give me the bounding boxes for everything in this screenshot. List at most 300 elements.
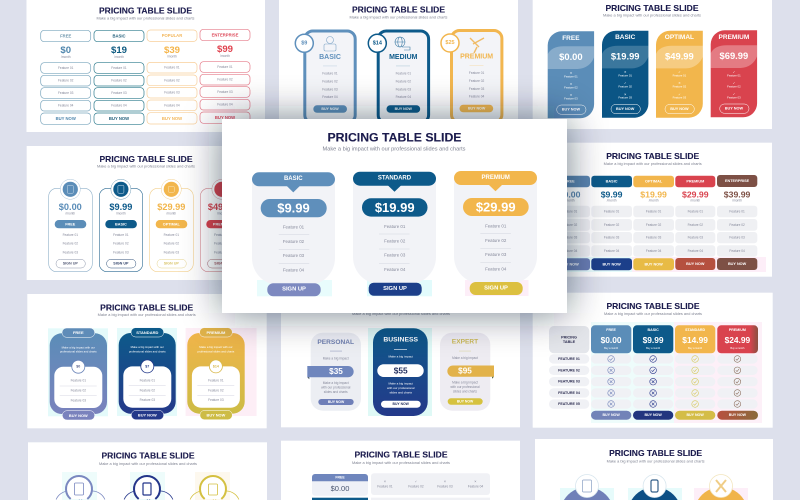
column: basic $9.99 bbox=[591, 176, 632, 270]
card: premium $69.99: BUY NOW bbox=[725, 107, 743, 111]
column: premium $29.99: BUY NOW bbox=[686, 262, 705, 266]
card: premium $69.99: Feature 03 bbox=[727, 95, 741, 99]
card: business $55: $55 bbox=[394, 366, 408, 376]
column: enterprise $39.99 bbox=[717, 175, 757, 270]
panel: personal business expert slide bbox=[281, 300, 520, 427]
row: free $0.00: ✕ bbox=[474, 480, 477, 484]
column: basic: $19 bbox=[111, 45, 127, 56]
card: optimal $29.99: /month bbox=[166, 212, 176, 216]
subheading: Make a big impact with our professional slides and charts bbox=[607, 460, 705, 464]
card: free: Feature 02 bbox=[71, 389, 86, 393]
feature row labels: FEATURE 03 bbox=[558, 380, 580, 384]
card: basic: BUY NOW bbox=[321, 107, 339, 111]
card: basic $19.99: BUY NOW bbox=[616, 107, 635, 111]
column: optimal $19.99: Feature 03 bbox=[646, 236, 662, 240]
card: premium: PREMIUM bbox=[460, 54, 493, 60]
column: premium $29.99 bbox=[675, 176, 715, 270]
card: free: Feature 03 bbox=[71, 398, 86, 402]
icon: globe bbox=[395, 37, 410, 50]
card: optimal $49.99: Feature 01 bbox=[673, 74, 687, 78]
feature row labels: FEATURE 05 bbox=[558, 402, 580, 406]
row: free $0.00: Feature 01 bbox=[377, 485, 393, 489]
card: optimal $49.99: BUY NOW bbox=[670, 107, 689, 111]
column: free $0.00: /month bbox=[565, 198, 575, 202]
column: free $0.00: Feature 03 bbox=[562, 236, 578, 240]
column: enterprise $39.99: BUY NOW bbox=[728, 262, 747, 266]
button: sign up: SIGN UP bbox=[282, 287, 306, 293]
column: enterprise: Feature 03 bbox=[217, 90, 233, 94]
column: basic $9.99 bbox=[633, 325, 673, 420]
feature list: Feature 03 bbox=[283, 253, 305, 258]
card: optimal $49.99 bbox=[656, 31, 703, 118]
feature list: Feature 04 bbox=[384, 267, 406, 272]
card: basic $9.99: Feature 02 bbox=[113, 242, 129, 246]
plan header: STANDARD bbox=[378, 175, 412, 181]
heading: PRICING TABLE SLIDE bbox=[100, 154, 193, 164]
card: personal $35: with our professional bbox=[321, 385, 351, 389]
card: free $0.00: $0.00 bbox=[59, 202, 82, 212]
heading: PRICING TABLE SLIDE bbox=[328, 131, 462, 145]
column: free $0.00 bbox=[591, 325, 631, 420]
column: popular: Feature 04 bbox=[164, 103, 180, 107]
column: basic $9.99: BUY NOW bbox=[602, 262, 621, 266]
column: free: Feature 01 bbox=[58, 66, 74, 70]
row: free $0.00: ✓ bbox=[415, 480, 417, 484]
column: free $0.00: Feature 01 bbox=[562, 210, 578, 214]
card: personal $35: slides and charts bbox=[324, 390, 348, 394]
card: standard $19.99 bbox=[353, 172, 436, 296]
card: premium bbox=[441, 30, 502, 122]
column: premium $29.99: /month bbox=[690, 198, 700, 202]
column: premium $24.99: PREMIUM bbox=[729, 328, 746, 332]
column: optimal $19.99: $19.99 bbox=[640, 189, 667, 199]
card: standard bbox=[117, 328, 177, 420]
column: enterprise $39.99: /month bbox=[732, 198, 742, 202]
subheading: Make a big impact with our professional slides and charts bbox=[99, 462, 197, 466]
heading: PRICING TABLE SLIDE bbox=[354, 450, 448, 460]
price pill: $29.99 bbox=[476, 200, 516, 214]
card: expert $95: Make a big impact bbox=[452, 356, 478, 360]
card: free $0.00: SIGN UP bbox=[63, 262, 78, 266]
column: premium $29.99: PREMIUM bbox=[686, 180, 704, 184]
card: basic: Feature 04 bbox=[322, 95, 338, 99]
column: basic: BASIC bbox=[112, 34, 126, 38]
card: premium $69.99: $69.99 bbox=[720, 50, 748, 61]
card: free bbox=[48, 328, 108, 420]
subheading: Make a big impact with our professional slides and charts bbox=[322, 146, 466, 152]
column: premium $29.99: $29.99 bbox=[682, 189, 709, 199]
card: business $55: Make a big impact bbox=[389, 382, 413, 386]
icon circle: standard bbox=[124, 476, 173, 500]
card: free $0.00: Feature 03 bbox=[564, 96, 578, 100]
card: basic $9.99: Feature 01 bbox=[113, 233, 129, 237]
panel: bottom middle cropped list table slide bbox=[281, 441, 520, 500]
card: free: Feature 01 bbox=[71, 379, 86, 383]
card: optimal $29.99: SIGN UP bbox=[164, 262, 179, 266]
card: free $0.00 bbox=[548, 31, 594, 118]
panel: feature comparison matrix slide bbox=[533, 293, 773, 428]
subheading: Make a big impact with our professional slides and charts bbox=[98, 313, 196, 317]
card: medium: Feature 03 bbox=[396, 87, 411, 91]
card: premium: BUY NOW bbox=[468, 106, 486, 110]
card: premium: Feature 02 bbox=[469, 79, 485, 83]
column: enterprise $39.99: Feature 01 bbox=[729, 210, 745, 214]
column: free $0.00: $0.00 bbox=[559, 189, 581, 199]
column: basic $9.99: Feature 03 bbox=[604, 236, 620, 240]
card: optimal $29.99 bbox=[150, 179, 193, 272]
column: optimal $19.99: Feature 04 bbox=[646, 249, 662, 253]
card: basic $19.99: Feature 03 bbox=[618, 96, 632, 100]
feature list: Feature 03 bbox=[485, 252, 507, 257]
card: expert $95: EXPERT bbox=[452, 338, 478, 346]
card: premium: Feature 02 bbox=[208, 388, 224, 392]
column: standard $14.99: Buy a month bbox=[688, 347, 703, 350]
subheading: Make a big impact with our professional slides and charts bbox=[604, 312, 702, 316]
feature list: Feature 04 bbox=[485, 266, 507, 272]
card: basic $19.99: ✕ bbox=[624, 92, 627, 96]
card: premium: PREMIUM bbox=[206, 330, 226, 335]
panel: five-column comparison table slide bbox=[533, 143, 772, 277]
card: optimal $29.99: Feature 01 bbox=[164, 233, 179, 237]
card: premium $69.99: ✓ bbox=[733, 81, 735, 85]
badge: $14: $14 bbox=[373, 40, 383, 46]
plan header: PREMIUM bbox=[482, 175, 510, 181]
heading: PRICING TABLE SLIDE bbox=[609, 448, 702, 458]
column: premium $24.99: BUY NOW bbox=[729, 413, 747, 417]
column: enterprise: ENTERPRISE bbox=[212, 32, 239, 38]
column: enterprise: Feature 04 bbox=[217, 103, 233, 107]
feature list: Feature 02 bbox=[485, 238, 507, 243]
feature list: Feature 02 bbox=[283, 239, 305, 244]
card: premium $49.99: $49.99 bbox=[208, 202, 236, 212]
column: basic $9.99: BASIC bbox=[606, 180, 618, 184]
column: free $0.00 bbox=[549, 176, 590, 270]
column: optimal $19.99: OPTIMAL bbox=[645, 180, 663, 184]
column: premium $24.99 bbox=[717, 325, 758, 420]
column: basic $9.99: BUY NOW bbox=[644, 413, 662, 417]
subheading: Make a big impact with our professional slides and charts bbox=[603, 14, 701, 18]
column: enterprise $39.99: $39.99 bbox=[724, 189, 751, 199]
column: free $0.00: FREE bbox=[565, 180, 575, 184]
card: free $0.00: FREE bbox=[65, 222, 76, 226]
card: basic $19.99: $19.99 bbox=[611, 51, 640, 62]
card: expert $95: $95 bbox=[458, 367, 472, 376]
column: enterprise: BUY NOW bbox=[215, 115, 235, 120]
card: basic bbox=[295, 31, 355, 123]
row: free $0.00: Feature 03 bbox=[437, 485, 453, 489]
column: free: Feature 03 bbox=[58, 91, 74, 95]
column: optimal $19.99: Feature 01 bbox=[646, 210, 662, 214]
card: medium: Feature 04 bbox=[396, 95, 411, 99]
card: free $0.00: $0.00 bbox=[559, 51, 583, 62]
column: basic $9.99: $9.99 bbox=[643, 335, 664, 345]
card: premium $49.99: Feature 02 bbox=[214, 242, 230, 246]
icon circle: premium bbox=[190, 476, 239, 500]
feature list bbox=[379, 224, 410, 272]
card: premium $49.99: Feature 03 bbox=[214, 251, 230, 255]
card: standard: Feature 01 bbox=[140, 378, 155, 382]
column: popular bbox=[147, 30, 197, 124]
column: basic $9.99: BASIC bbox=[648, 328, 659, 332]
column: popular: Feature 03 bbox=[164, 91, 180, 95]
card: business $55 bbox=[368, 328, 432, 416]
card: expert $95: with our professional bbox=[450, 385, 480, 389]
card: basic $9.99: Feature 03 bbox=[113, 251, 129, 255]
feature row labels: FEATURE 02 bbox=[558, 368, 580, 372]
card: premium: Feature 04 bbox=[469, 94, 485, 98]
card: basic $19.99: Feature 02 bbox=[618, 85, 632, 89]
column: premium $29.99: Feature 01 bbox=[688, 210, 703, 214]
card: optimal $49.99: Feature 02 bbox=[673, 85, 687, 89]
card: optimal $29.99: $29.99 bbox=[157, 202, 185, 212]
feature list: Feature 01 bbox=[283, 224, 305, 230]
card: medium: Feature 02 bbox=[396, 79, 411, 83]
card: optimal $49.99: $49.99 bbox=[665, 51, 694, 62]
card: personal $35: PERSONAL bbox=[317, 339, 354, 346]
column: basic: BUY NOW bbox=[109, 116, 129, 121]
card: free: FREE bbox=[73, 330, 84, 335]
card: standard: STANDARD bbox=[136, 330, 158, 335]
column: basic $9.99: $9.99 bbox=[601, 189, 623, 199]
feature list bbox=[480, 224, 511, 272]
card: basic $9.99: $9.99 bbox=[109, 202, 132, 212]
column: free: Feature 04 bbox=[58, 104, 74, 108]
row: free $0.00: ✕ bbox=[444, 480, 447, 484]
column: free $0.00: BUY NOW bbox=[560, 262, 579, 266]
column: basic: Feature 04 bbox=[111, 104, 127, 108]
card: optimal $49.99: ✓ bbox=[678, 70, 681, 74]
subheading: Make a big impact with our professional slides and charts bbox=[97, 165, 195, 169]
subheading: Make a big impact with our professional slides and charts bbox=[96, 17, 195, 21]
card: free $0.00 bbox=[49, 179, 92, 272]
column: free: Feature 02 bbox=[58, 79, 74, 83]
corner label: TABLE bbox=[563, 340, 576, 344]
feature list: Feature 02 bbox=[384, 238, 406, 244]
dome: free bbox=[564, 474, 610, 500]
card: free $0.00: ✕ bbox=[570, 71, 573, 75]
column: free $0.00: Feature 04 bbox=[562, 249, 578, 253]
column: standard $14.99: BUY NOW bbox=[686, 413, 704, 417]
subheading: Make a big impact with our professional slides and charts bbox=[604, 162, 702, 166]
column: popular: $39 bbox=[164, 45, 180, 56]
panel: outlined cards with icon circles slide bbox=[27, 146, 265, 280]
card: optimal $49.99: ✓ bbox=[678, 92, 681, 96]
column: basic $9.99: /month bbox=[607, 198, 617, 202]
card: free: professional slides and charts bbox=[60, 350, 97, 354]
heading: PRICING TABLE SLIDE bbox=[606, 301, 700, 311]
card: standard: BUY NOW bbox=[138, 412, 157, 418]
card: premium $49.99: PREMIUM bbox=[213, 222, 231, 226]
subheading: Make a big impact with our professional slides and charts bbox=[352, 461, 450, 465]
panel: rounded gradient cards slide bbox=[27, 294, 267, 428]
card: premium $29.99 bbox=[454, 171, 537, 296]
card: standard: $7 bbox=[145, 364, 149, 368]
card: free $0.00: Feature 03 bbox=[63, 251, 78, 255]
column: enterprise: Feature 02 bbox=[217, 78, 233, 82]
row: free $0.00: Feature 04 bbox=[468, 485, 483, 489]
soft shadow of the main slide bbox=[222, 119, 567, 313]
feature list: Feature 04 bbox=[283, 268, 305, 272]
card: free $0.00: Feature 01 bbox=[564, 74, 578, 78]
card: optimal $29.99: Feature 03 bbox=[164, 251, 179, 255]
column: enterprise: $99 bbox=[217, 44, 233, 55]
card: business $55: BUY NOW bbox=[393, 402, 410, 406]
panel: outlined four-tier pricing table slide bbox=[26, 0, 265, 132]
card: free $0.00: FREE bbox=[562, 35, 580, 42]
column: popular: POPULAR bbox=[162, 33, 182, 38]
panel: bottom left cropped icon cards slide bbox=[28, 442, 267, 500]
column: basic: Feature 01 bbox=[111, 66, 127, 70]
panel: solid colour cards slide bbox=[533, 0, 772, 129]
card: expert $95: slides and charts bbox=[453, 390, 477, 394]
card: basic $19.99: ✕ bbox=[624, 70, 627, 74]
price pill: $19.99 bbox=[375, 200, 415, 215]
card: premium bbox=[186, 328, 257, 420]
card: premium $69.99: ✓ bbox=[733, 70, 735, 74]
row: free $0.00: $0.00 bbox=[331, 484, 349, 493]
card: medium: BUY NOW bbox=[395, 107, 413, 111]
column: optimal $19.99: Feature 02 bbox=[646, 223, 662, 227]
card: basic $19.99 bbox=[602, 31, 648, 118]
column: free $0.00: Buy a month bbox=[604, 347, 619, 350]
column: free $0.00: FREE bbox=[606, 328, 616, 332]
card: premium: Make a big impact with our bbox=[199, 345, 233, 349]
card: premium $69.99: ✓ bbox=[733, 92, 735, 96]
column: basic $9.99: Feature 01 bbox=[604, 210, 620, 214]
column: optimal $19.99: /month bbox=[649, 198, 659, 202]
plan header: BASIC bbox=[284, 176, 303, 182]
column: free bbox=[41, 30, 91, 124]
card: free $0.00: ✕ bbox=[570, 93, 573, 97]
card: expert $95 bbox=[440, 333, 494, 411]
row: second plan header bbox=[312, 498, 490, 500]
column: premium $29.99: Feature 03 bbox=[688, 236, 703, 240]
column: popular: Feature 01 bbox=[164, 66, 180, 70]
card: optimal $49.99: OPTIMAL bbox=[665, 34, 694, 41]
column: optimal $19.99 bbox=[633, 176, 674, 270]
card: personal $35 bbox=[307, 333, 361, 411]
feature list: Feature 01 bbox=[485, 224, 507, 228]
column: enterprise: Feature 01 bbox=[217, 65, 233, 69]
card: premium $49.99 bbox=[200, 179, 244, 272]
column: enterprise $39.99: Feature 04 bbox=[729, 249, 745, 253]
icon circle: free bbox=[56, 476, 105, 500]
card: premium $69.99: PREMIUM bbox=[719, 34, 749, 41]
column: free $0.00: $0.00 bbox=[601, 335, 622, 345]
card: business $55: with our professional bbox=[387, 386, 415, 390]
card: basic: BASIC bbox=[319, 54, 341, 61]
column: enterprise $39.99: ENTERPRISE bbox=[725, 179, 750, 183]
column: premium $29.99: Feature 02 bbox=[688, 223, 703, 227]
card: basic $19.99: BASIC bbox=[615, 34, 636, 41]
card: optimal $29.99: Feature 02 bbox=[164, 242, 179, 246]
feature row labels: FEATURE 04 bbox=[558, 391, 580, 395]
heading: PRICING TABLE SLIDE bbox=[102, 451, 195, 461]
card: standard: Feature 03 bbox=[140, 398, 155, 402]
column: free: /month bbox=[61, 55, 71, 59]
column: standard $14.99: $14.99 bbox=[682, 335, 708, 345]
column: popular: /month bbox=[167, 55, 177, 59]
column: free $0.00: BUY NOW bbox=[602, 413, 620, 417]
corner label: PRICING bbox=[561, 335, 577, 339]
heading: PRICING TABLE SLIDE bbox=[352, 4, 445, 14]
feature row labels bbox=[549, 354, 589, 409]
price pill: $9.99 bbox=[277, 200, 310, 215]
column: optimal $19.99: BUY NOW bbox=[644, 262, 663, 266]
card: business $55: Make a big impact bbox=[389, 354, 413, 358]
card: optimal $29.99: OPTIMAL bbox=[163, 222, 181, 226]
subheading: Make a big impact with our professional slides and charts bbox=[350, 15, 448, 19]
corner label bbox=[549, 326, 589, 353]
card: medium: MEDIUM bbox=[389, 54, 418, 61]
card: free $0.00: Feature 02 bbox=[63, 242, 78, 246]
card: premium: Feature 01 bbox=[469, 71, 485, 75]
card: premium: Feature 03 bbox=[469, 87, 485, 91]
button: sign up: SIGN UP bbox=[484, 286, 508, 292]
card: basic $19.99: Feature 01 bbox=[618, 74, 632, 78]
column: premium $24.99: $24.99 bbox=[725, 335, 751, 345]
card: standard: Feature 02 bbox=[140, 388, 155, 392]
card: premium $49.99: Feature 01 bbox=[214, 233, 230, 237]
dome: premium bbox=[698, 474, 744, 500]
card: business $55: slides and charts bbox=[389, 391, 412, 395]
card: free: $0 bbox=[76, 365, 80, 369]
card: basic $9.99: SIGN UP bbox=[113, 262, 129, 266]
subheading: Make a big impact with our professional slides and charts bbox=[352, 312, 450, 316]
column: standard $14.99 bbox=[675, 325, 715, 420]
panel: framed cards with price badges slide bbox=[279, 0, 518, 123]
card: expert $95: Make a big impact bbox=[452, 381, 478, 385]
card: basic $9.99: /month bbox=[116, 212, 126, 216]
card: free $0.00: Feature 02 bbox=[564, 85, 578, 89]
column: basic: Feature 03 bbox=[111, 91, 127, 95]
heading: PRICING TABLE SLIDE bbox=[100, 302, 194, 312]
heading: PRICING TABLE SLIDE bbox=[99, 6, 192, 16]
column: premium $29.99: Feature 04 bbox=[688, 249, 703, 253]
column: popular: Feature 02 bbox=[164, 78, 180, 82]
card: personal $35: Make a big impact bbox=[323, 381, 349, 385]
column: enterprise $39.99: Feature 02 bbox=[729, 223, 745, 227]
column: enterprise: /month bbox=[220, 54, 230, 58]
card: basic: Feature 01 bbox=[322, 72, 338, 76]
card: optimal $49.99: Feature 03 bbox=[673, 96, 687, 100]
card: premium: professional slides and charts bbox=[197, 349, 235, 353]
icon: tools bbox=[470, 38, 484, 53]
card: medium bbox=[368, 31, 429, 123]
column: free: $0 bbox=[60, 45, 71, 56]
card: basic: Feature 03 bbox=[322, 87, 338, 91]
card: premium: $14 bbox=[213, 364, 219, 368]
card: basic $9.99 bbox=[99, 179, 143, 272]
badge: $9: $9 bbox=[301, 40, 307, 46]
card: premium $49.99: SIGN UP bbox=[214, 262, 230, 266]
card: personal $35: Make a big impact bbox=[323, 356, 349, 360]
feature list bbox=[279, 224, 309, 272]
column: enterprise bbox=[200, 29, 250, 123]
column: basic: Feature 02 bbox=[111, 79, 127, 83]
button: sign up: SIGN UP bbox=[383, 286, 407, 292]
card: personal $35: BUY NOW bbox=[328, 400, 345, 404]
column: basic bbox=[94, 30, 144, 124]
card: premium: Feature 03 bbox=[208, 398, 224, 402]
card: standard: Make a big impact with our bbox=[131, 345, 164, 349]
badge: $25: $25 bbox=[445, 40, 455, 46]
panel: bottom right cropped dome cards slide bbox=[535, 439, 773, 500]
column: basic: /month bbox=[114, 55, 124, 59]
card: basic $19.99: ✓ bbox=[624, 81, 626, 85]
icon: person bbox=[324, 36, 336, 51]
card: free $0.00: Feature 01 bbox=[63, 233, 78, 237]
